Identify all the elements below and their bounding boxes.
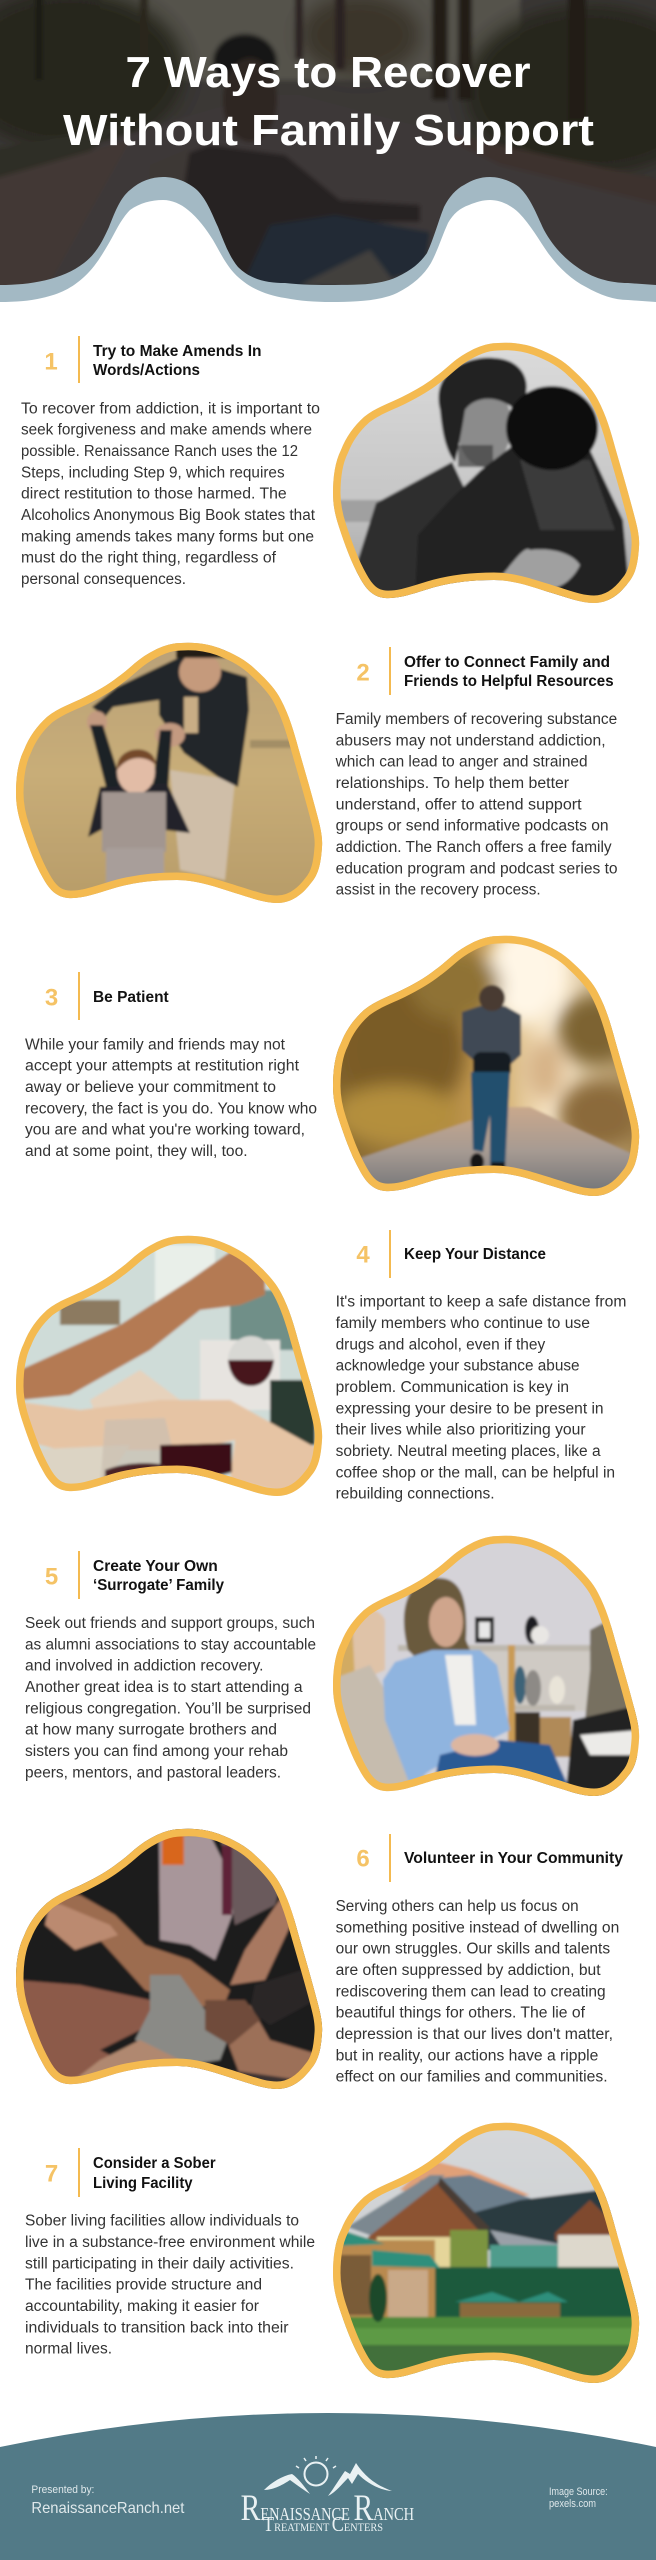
title — [63, 48, 594, 155]
photo 3: person walking down a sunlit road — [333, 936, 640, 1196]
body text 6: our own struggles. Our skills and talents — [336, 1941, 610, 1958]
body text 7: Sober living facilities allow individuals to — [25, 2213, 299, 2230]
heading 5: ‘Surrogate’ Family — [93, 1577, 224, 1594]
divider 2 — [389, 647, 391, 695]
body text 2: education program and podcast series to — [336, 860, 618, 877]
divider 5 — [78, 1551, 80, 1599]
body text 7: accountability, making it easier for — [25, 2298, 259, 2315]
body text 4: rebuilding connections. — [336, 1486, 495, 1503]
body text 2: assist in the recovery process. — [336, 882, 541, 899]
number 2: 2 — [356, 660, 370, 686]
number 5: 5 — [45, 1564, 58, 1590]
body text 7: normal lives. — [25, 2341, 112, 2358]
heading 2: Offer to Connect Family and — [404, 654, 610, 671]
body text 2: understand, offer to attend support — [336, 796, 582, 813]
logo wordmark: RENAISSANCE RANCH — [241, 2488, 414, 2529]
footer — [0, 2413, 656, 2560]
body text 2: abusers may not understand addiction, — [336, 732, 606, 749]
divider 1 — [78, 336, 80, 383]
ring 1 — [333, 343, 639, 603]
body text 5 — [25, 1615, 316, 1781]
heading 2: Friends to Helpful Resources — [404, 673, 614, 690]
wave: blue-gray band — [0, 0, 656, 302]
body text 4: It's important to keep a safe distance from — [336, 1294, 626, 1311]
body text 1: To recover from addiction, it is important to — [21, 400, 320, 417]
number 7: 7 — [45, 2160, 58, 2188]
body text 1 — [21, 400, 320, 588]
body text 6: Serving others can help us focus on — [336, 1898, 579, 1915]
body text 3: and at some point, they will, too. — [25, 1143, 248, 1160]
body text 1: direct restitution to those harmed. The — [21, 486, 287, 503]
body text 3: recovery, the fact is you do. You know who — [25, 1100, 317, 1117]
body text 4 — [336, 1294, 626, 1503]
body text 4: coffee shop or the mall, can be helpful in — [336, 1464, 615, 1481]
body text 6: rediscovering them can lead to creating — [336, 1983, 606, 2000]
panel 7: sober living — [25, 2115, 645, 2392]
heading 7: Consider a Sober — [93, 2155, 216, 2172]
panel 4: keep your distance — [8, 1228, 626, 1503]
image source — [549, 2486, 608, 2510]
image source: pexels.com — [549, 2498, 596, 2510]
header banner — [0, 0, 656, 302]
header photo: man sitting on a forest road — [0, 0, 656, 300]
body text 3: While your family and friends may not — [25, 1036, 286, 1053]
body text 1: must do the right thing, regardless of — [21, 550, 277, 567]
body text 4: family members who continue to use — [336, 1315, 590, 1332]
ring 7 — [333, 2123, 639, 2383]
panel 6: volunteer — [8, 1821, 623, 2096]
footer band — [0, 2413, 656, 2560]
body text 2: groups or send informative podcasts on — [336, 818, 609, 835]
body text 2: Family members of recovering substance — [336, 711, 617, 728]
body text 7 — [25, 2213, 315, 2358]
body text 4: expressing your desire to be present in — [336, 1400, 604, 1417]
body text 1: Steps, including Step 9, which requires — [21, 464, 285, 481]
body text 1: making amends takes many forms but one — [21, 528, 314, 545]
heading 1: Try to Make Amends In — [93, 343, 262, 360]
body text 3: you are and what you're working toward, — [25, 1122, 305, 1139]
body text 4: their lives while also prioritizing your — [336, 1422, 586, 1439]
body text 5: at how many surrogate brothers and — [25, 1722, 277, 1739]
number 4: 4 — [356, 1242, 370, 1268]
heading 2 — [404, 654, 614, 690]
ring 2 — [16, 643, 322, 903]
number 1: 1 — [44, 348, 58, 376]
body text 6 — [336, 1898, 619, 2086]
ring 3 — [333, 936, 639, 1196]
divider 6 — [389, 1834, 391, 1882]
body text 4: drugs and alcohol, even if they — [336, 1336, 545, 1353]
photo 6: group of stacked hands — [16, 1828, 322, 2089]
photo 1: couple embracing in black and white — [325, 335, 645, 610]
divider 3 — [78, 972, 80, 1020]
photo 2: father and laughing toddler in a field — [16, 642, 322, 903]
body text 6: something positive instead of dwelling on — [336, 1919, 619, 1936]
heading 5 — [93, 1558, 224, 1594]
body text 1: personal consequences. — [21, 571, 186, 588]
body text 4: sobriety. Neutral meeting places, like a — [336, 1443, 601, 1460]
ring 6 — [16, 1829, 322, 2089]
panel 3: be patient — [25, 925, 645, 1205]
presented by: Presented by: — [31, 2484, 94, 2496]
body text 7: live in a substance-free environment while — [25, 2234, 315, 2251]
body text 2 — [335, 711, 618, 899]
heading 3: Be Patient — [93, 989, 169, 1006]
body text 5: as alumni associations to stay accountable — [25, 1636, 316, 1653]
heading 1: Words/Actions — [93, 362, 200, 379]
body text 7: individuals to transition back into their — [25, 2319, 289, 2336]
photo 4: people toasting with red wine — [16, 1236, 322, 1496]
body text 6: beautiful things for others. The lie of — [336, 2005, 586, 2022]
body text 1: seek forgiveness and make amends where — [21, 422, 312, 439]
ring 4 — [16, 1236, 322, 1496]
body text 7: The facilities provide structure and — [25, 2277, 262, 2294]
body text 2: relationships. To help them better — [336, 775, 569, 792]
body text 1: Alcoholics Anonymous Big Book states that — [21, 507, 316, 524]
body text 4: acknowledge your substance abuse — [336, 1358, 580, 1375]
body text 2: addiction. The Ranch offers a free family — [336, 839, 612, 856]
body text 2: which can lead to anger and strained — [335, 754, 588, 771]
panel 2: connect family and friends — [8, 635, 618, 910]
presented by: RenaissanceRanch.net — [31, 2500, 185, 2517]
presented by — [31, 2484, 185, 2517]
number 6: 6 — [356, 1846, 370, 1872]
body text 6: but in reality, our actions have a ripple — [336, 2047, 598, 2064]
body text 6: are often suppressed by addiction, but — [336, 1962, 601, 1979]
image source: Image Source: — [549, 2486, 608, 2498]
body text 1: possible. Renaissance Ranch uses the 12 — [21, 443, 298, 460]
divider 7 — [78, 2148, 80, 2197]
body text 5: religious congregation. You’ll be surprised — [25, 1700, 311, 1717]
panel 1: make amends — [21, 335, 645, 610]
body text 3 — [25, 1036, 317, 1160]
body text 7: still participating in their daily activities. — [25, 2255, 294, 2272]
heading 5: Create Your Own — [93, 1558, 218, 1575]
heading 7: Living Facility — [93, 2175, 193, 2192]
ring 5 — [333, 1536, 639, 1796]
divider 4 — [389, 1230, 391, 1278]
photo 5: young man in counseling session — [325, 1528, 645, 1803]
heading 6: Volunteer in Your Community — [404, 1850, 623, 1867]
number 3: 3 — [45, 984, 58, 1012]
panel 5: surrogate family — [25, 1528, 645, 1803]
body text 5: and involved in addiction recovery. — [25, 1658, 264, 1675]
body text 5: peers, mentors, and pastoral leaders. — [25, 1764, 281, 1781]
heading 4: Keep Your Distance — [404, 1246, 546, 1263]
body text 5: sisters you can find among your rehab — [25, 1743, 288, 1760]
body text 6: effect on our families and communities. — [336, 2069, 608, 2086]
title: Without Family Support — [63, 106, 594, 155]
heading 1 — [93, 343, 262, 379]
logo tagline: TREATMENT CENTERS — [263, 2512, 383, 2536]
body text 6: depression is that our lives don't matter, — [336, 2026, 613, 2043]
body text 4: problem. Communication is key in — [336, 1379, 569, 1396]
logo: Renaissance Ranch Treatment Centers — [241, 2456, 414, 2536]
photo 7: wooden lodge houses with mountains — [325, 2115, 645, 2392]
heading 7 — [93, 2155, 216, 2192]
icon: sun and mountains — [264, 2456, 392, 2496]
body text 5: Seek out friends and support groups, such — [25, 1615, 315, 1632]
title: 7 Ways to Recover — [126, 48, 530, 97]
body text 3: accept your attempts at restitution right — [25, 1058, 300, 1075]
body text 5: Another great idea is to start attending a — [25, 1679, 303, 1696]
body text 3: away or believe your commitment to — [25, 1079, 276, 1096]
